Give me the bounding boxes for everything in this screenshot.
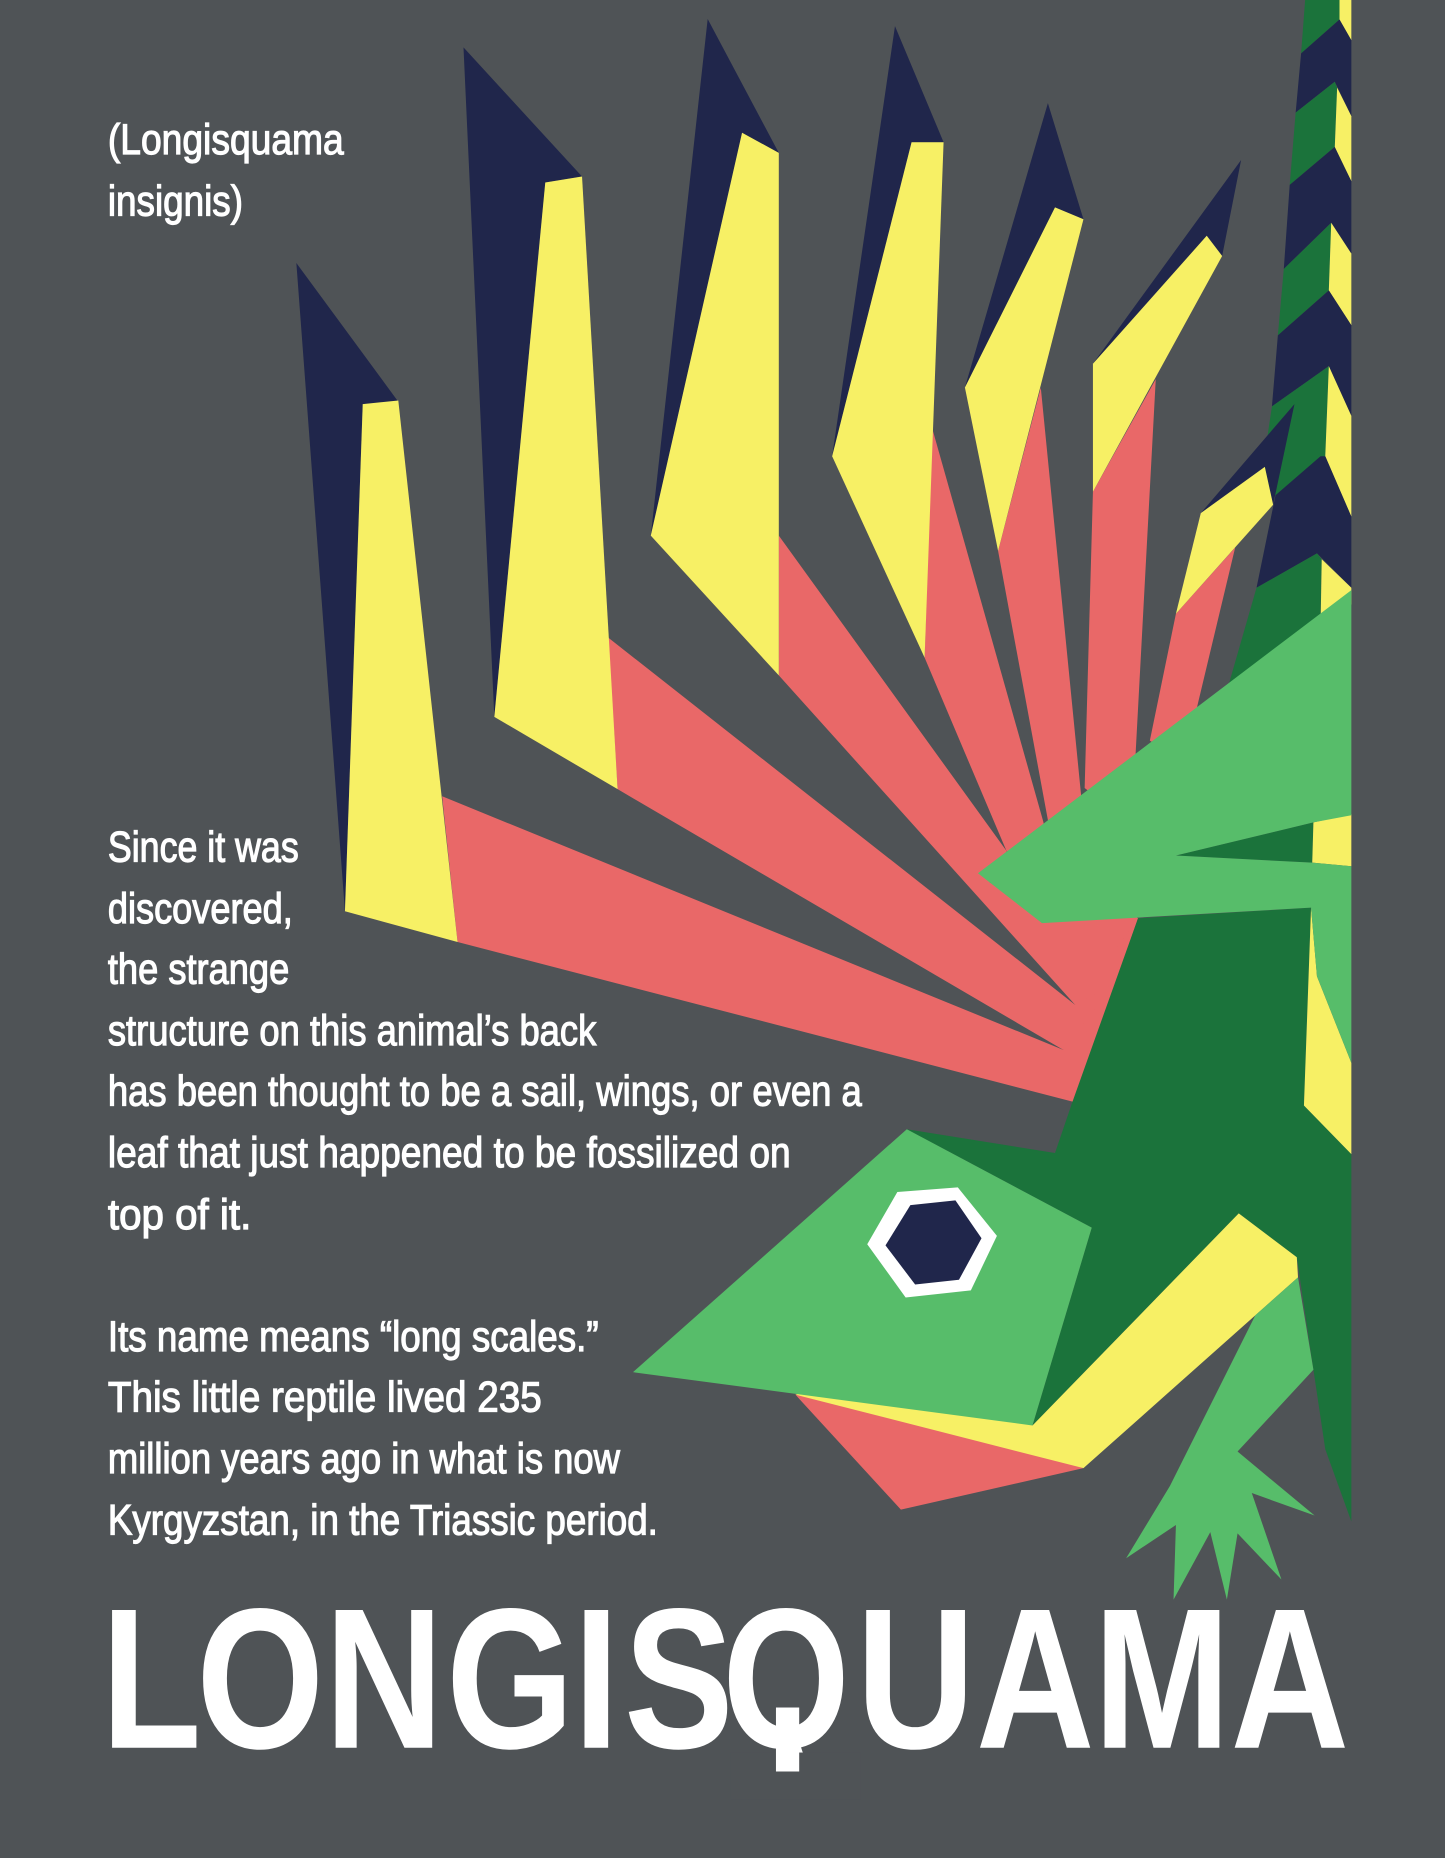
spine 3 (651, 19, 1138, 1005)
coral jaw (795, 1386, 1083, 1510)
text block: name meaning: This little reptile lived 235 (108, 1373, 542, 1421)
tail: striped pattern (1225, 0, 1351, 699)
text block: name meaning (108, 1313, 658, 1545)
spine 7 (1150, 404, 1294, 770)
light green front limb (978, 590, 1351, 1063)
spine 6 (1085, 160, 1241, 829)
yellow back patches (1304, 814, 1351, 1154)
title: LONGISQUAMA (101, 1566, 1349, 1790)
dark green body (907, 908, 1351, 1521)
text block: discovery: has been thought to be a sail, wings, or even a (108, 1068, 862, 1116)
coral fan base (978, 851, 1138, 1102)
text block: discovery: the strange (108, 946, 289, 994)
text block: name meaning: Kyrgyzstan, in the Triassic period. (108, 1497, 658, 1545)
text block: discovery: top of it. (108, 1191, 251, 1239)
light green head (633, 1129, 1092, 1425)
scientific name: insignis) (108, 178, 243, 226)
text block: name meaning: Its name means “long scales.” (108, 1313, 599, 1361)
text block: discovery: structure on this animal’s back (108, 1007, 597, 1055)
spine 2 (463, 47, 1114, 1050)
scientific name (108, 116, 344, 226)
text block: discovery: discovered, (108, 885, 293, 933)
dark green notch (1176, 822, 1313, 863)
spine 5 (965, 103, 1091, 853)
spine 4 (832, 26, 1055, 877)
yellow throat stripe (795, 1213, 1298, 1468)
text block: discovery: Since it was (108, 823, 299, 871)
hind leg and claws (1126, 1277, 1315, 1600)
spine 1 (296, 263, 1102, 1102)
text block: discovery (108, 823, 862, 1239)
icon: eye (867, 1187, 997, 1298)
text block: name meaning: million years ago in what is now (108, 1435, 620, 1483)
scientific name: (Longisquama (108, 116, 344, 164)
text block: discovery: leaf that just happened to be fossilized on (108, 1129, 791, 1177)
